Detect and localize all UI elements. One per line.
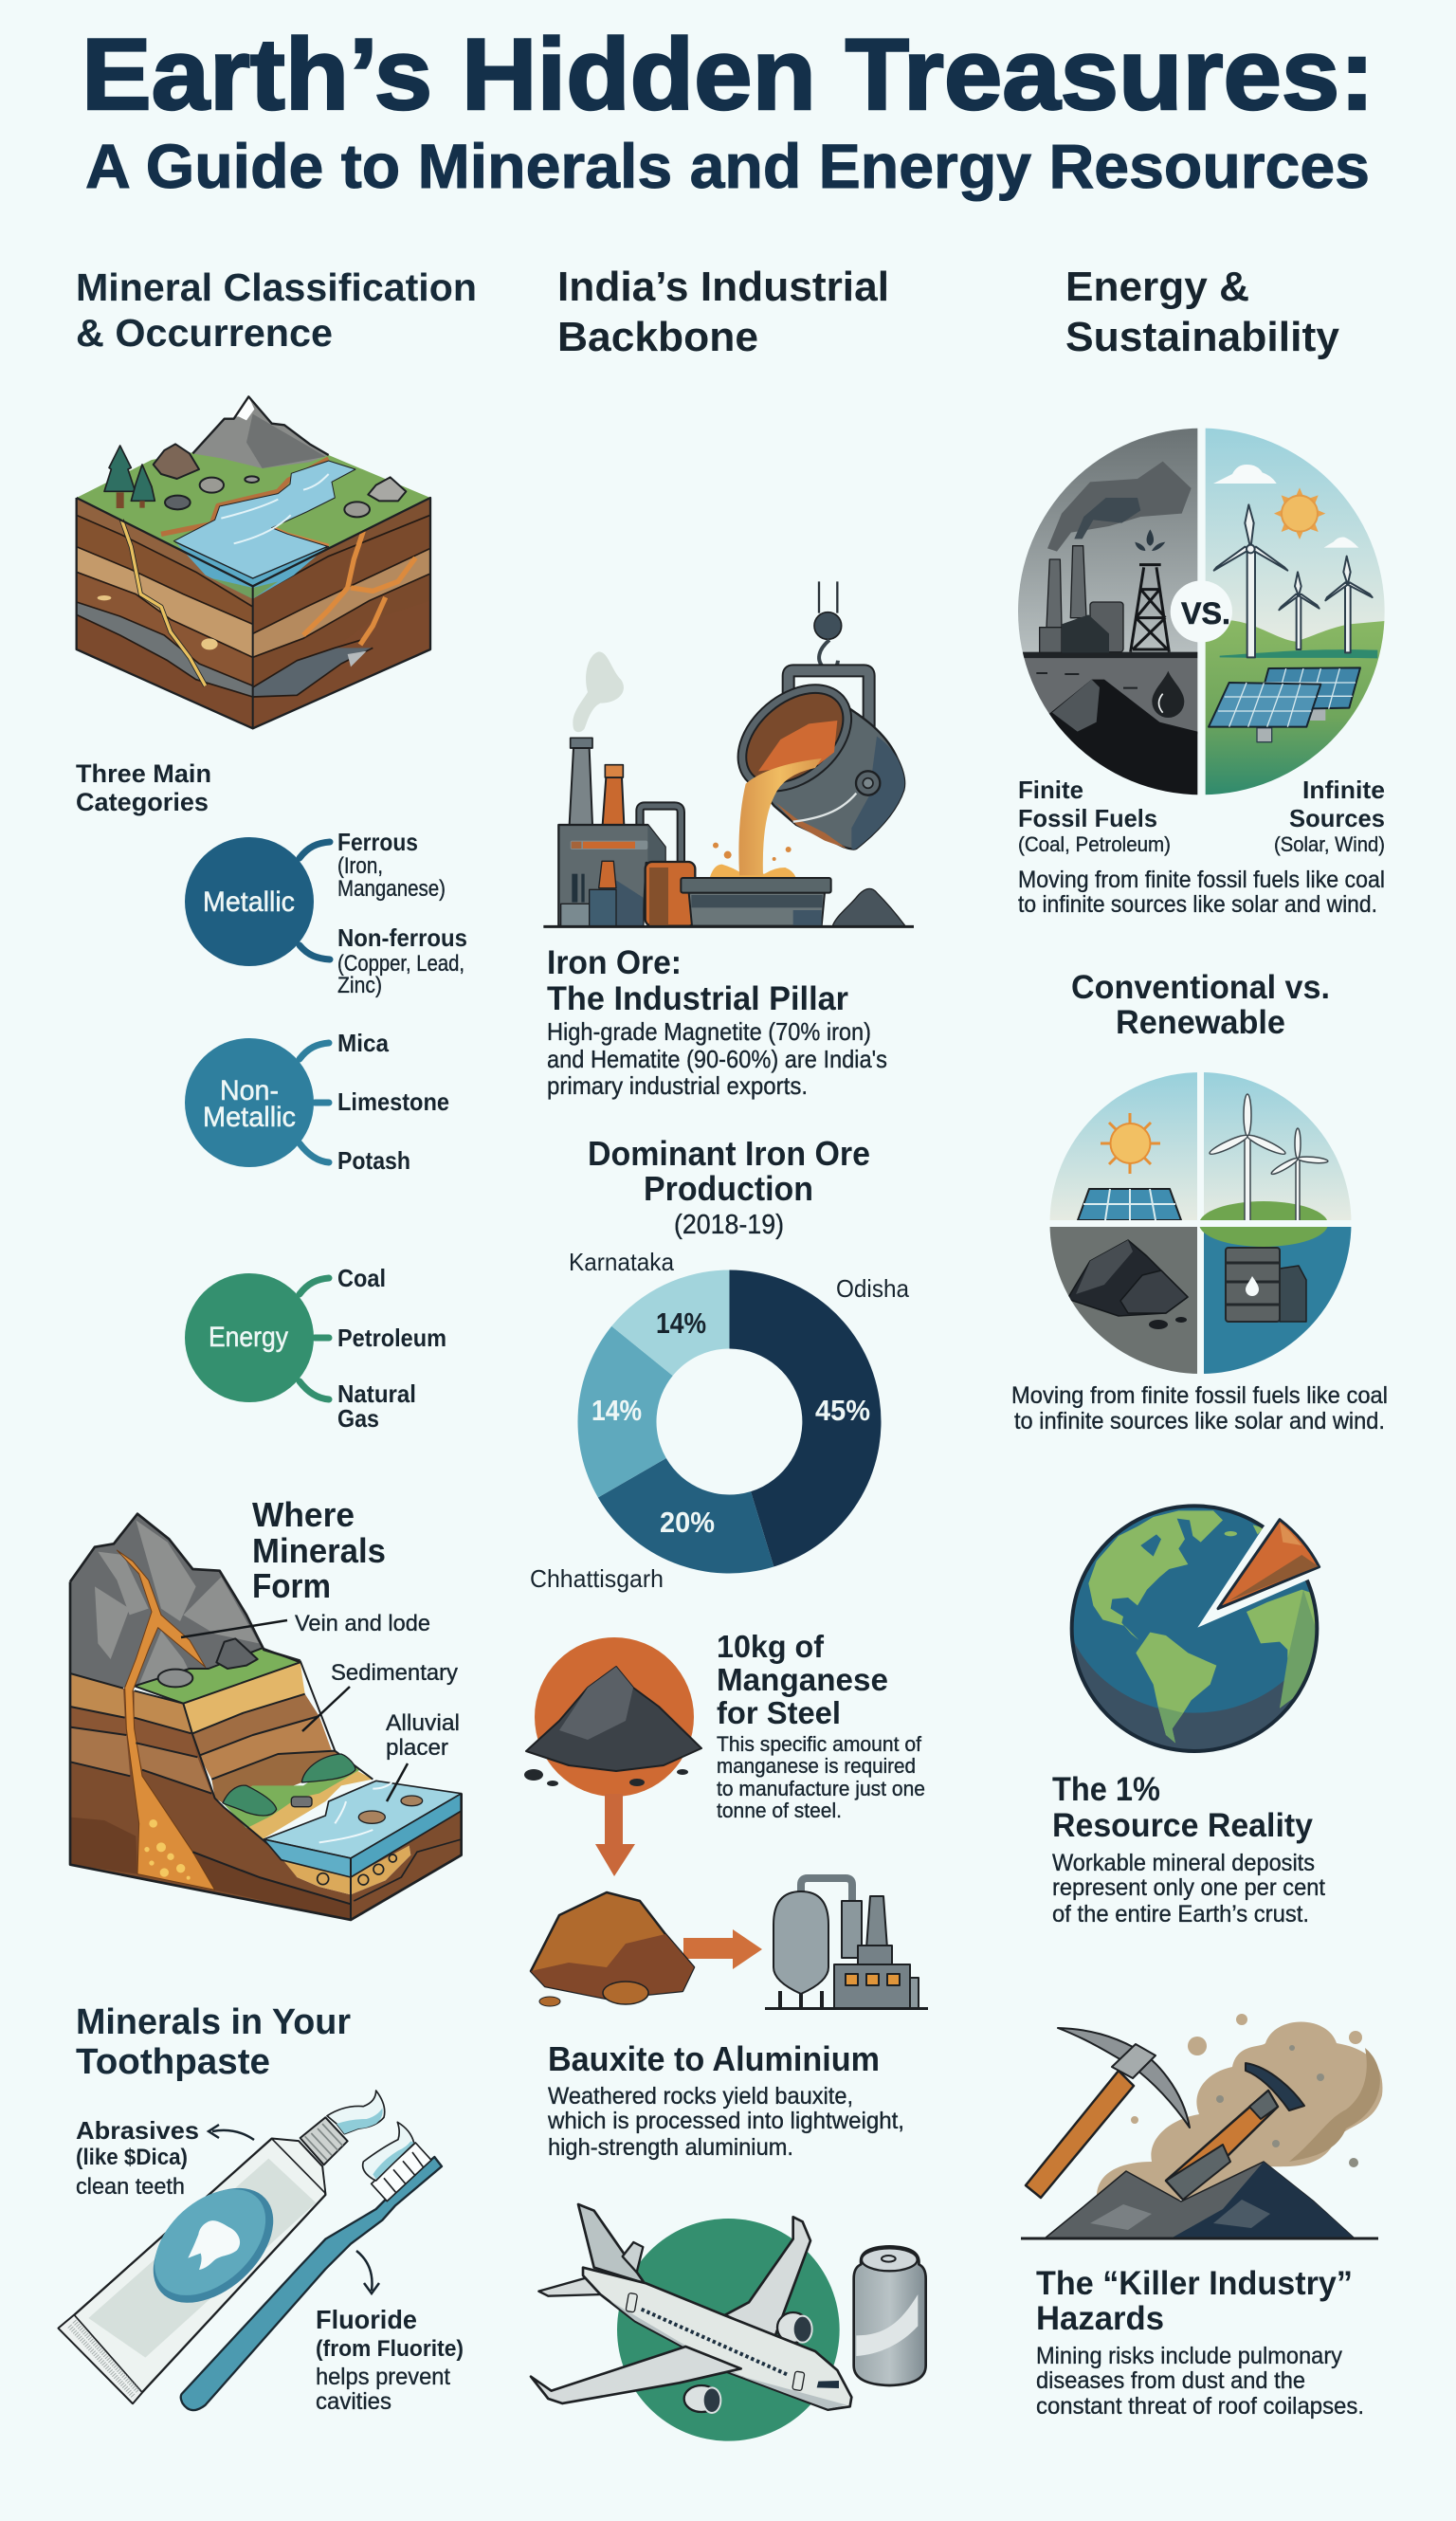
text: one percent resource reality: The 1% [1052, 1771, 1160, 1808]
label: alluvial placer: Alluvial [386, 1710, 460, 1736]
heading: conventional vs renewable [1071, 969, 1330, 1041]
heading: minerals in your toothpaste: Toothpaste [76, 2042, 270, 2082]
heading: India's industrial backbone: Backbone [557, 314, 758, 360]
heading: three main categories [76, 759, 211, 816]
text: one percent resource reality: Workable mineral deposits [1052, 1850, 1315, 1876]
label: vein and lode: Vein and lode [295, 1611, 430, 1636]
text: moving from finite, second [1011, 1382, 1388, 1434]
annotation: abrasives: clean teeth [76, 2174, 185, 2200]
category: non-metallic: Potash [337, 1146, 410, 1175]
text: one percent resource reality: represent only one per cent [1052, 1874, 1325, 1901]
illustration: isometric geological block [77, 396, 430, 728]
text: manganese for steel: to manufacture just one [717, 1777, 925, 1800]
illustration: airplane and can [531, 2204, 926, 2441]
text: bauxite to aluminium: Bauxite to Aluminium [548, 2039, 880, 2078]
text: manganese for steel: 10kg of [717, 1629, 825, 1664]
heading: India's industrial backbone [557, 264, 889, 360]
label: alluvial placer [386, 1710, 460, 1801]
title: A Guide to Minerals and Energy Resources [85, 131, 1370, 201]
text: bauxite to aluminium [547, 2039, 904, 2161]
donut chart: iron ore production: 20% [660, 1506, 715, 1539]
heading: dominant iron ore production: (2018-19) [674, 1210, 784, 1240]
label: vs badge: VS. [1181, 596, 1230, 630]
text: one percent resource reality: of the entire Earth’s crust. [1052, 1901, 1309, 1927]
category: metallic: Zinc) [337, 973, 382, 998]
text: moving from finite, second: Moving from finite fossil fuels like coal [1011, 1382, 1388, 1409]
category: non-metallic: Metallic [203, 1102, 296, 1133]
text: killer industry hazards: Mining risks include pulmonary [1036, 2343, 1342, 2369]
heading: where minerals form: Where [252, 1495, 355, 1534]
label: vein and lode [181, 1611, 430, 1637]
text: bauxite to aluminium: which is processed into lightweight, [547, 2108, 904, 2134]
donut chart: iron ore production: 14% [592, 1394, 642, 1427]
text: killer industry hazards: Hazards [1036, 2300, 1164, 2337]
heading: minerals in your toothpaste: Minerals in Your [76, 2002, 351, 2042]
text: iron ore pillar: High-grade Magnetite (70% iron) [547, 1017, 871, 1046]
category: non-metallic: Mica [337, 1029, 389, 1057]
heading: energy and sustainability: Sustainability [1065, 314, 1340, 360]
text: iron ore pillar: The Industrial Pillar [547, 980, 848, 1017]
heading: mineral classification: Mineral Classification [76, 265, 477, 309]
text: one percent resource reality [1052, 1771, 1325, 1927]
heading: three main categories: Three Main [76, 759, 211, 788]
text: manganese for steel: This specific amount of [717, 1732, 922, 1756]
text: manganese for steel: manganese is required [717, 1754, 916, 1778]
text: killer industry hazards: diseases from dust and the [1036, 2367, 1305, 2394]
donut chart: iron ore production: Karnataka [569, 1248, 674, 1276]
illustration: mining hazards pick and hammer [1021, 2014, 1382, 2238]
text: moving from finite, second: to infinite sources like solar and wind. [1014, 1408, 1385, 1434]
text: bauxite to aluminium: Weathered rocks yield bauxite, [548, 2083, 853, 2110]
annotation: abrasives [76, 2116, 254, 2200]
illustration: four quadrant energy circle [1049, 1072, 1353, 1375]
illustration: manganese ore on orange disc [524, 1637, 701, 1876]
annotation: fluoride: cavities [316, 2388, 391, 2415]
text: killer industry hazards: constant threat of roof coilapses. [1036, 2393, 1364, 2420]
category: metallic: Metallic [203, 886, 295, 918]
category: metallic: (Copper, Lead, [337, 951, 464, 977]
heading: dominant iron ore production: Dominant Iron Ore [588, 1134, 870, 1173]
text: killer industry hazards: The “Killer Industry” [1036, 2265, 1353, 2302]
annotation: abrasives: Abrasives [76, 2116, 199, 2145]
category: metallic: (Iron, [337, 853, 383, 879]
text: manganese for steel: Manganese [717, 1662, 888, 1697]
donut chart: iron ore production [530, 1248, 909, 1593]
text: finite fossil fuels: Finite [1018, 776, 1083, 804]
heading: mineral classification [76, 265, 477, 355]
annotation: abrasives: (like $Dica) [76, 2145, 188, 2170]
text: iron ore pillar [547, 944, 887, 1100]
category: non-metallic [185, 1029, 449, 1175]
text: moving from finite: to infinite sources like solar and wind. [1018, 891, 1377, 918]
text: finite fossil fuels: (Coal, Petroleum) [1018, 832, 1171, 856]
text: killer industry hazards [1036, 2265, 1364, 2420]
illustration: bauxite rock to refinery [531, 1878, 928, 2008]
text: one percent resource reality: Resource Reality [1052, 1807, 1314, 1844]
text: iron ore pillar: primary industrial exports. [547, 1071, 808, 1100]
label: sedimentary [302, 1660, 458, 1731]
text: iron ore pillar: and Hematite (90-60%) are India's [547, 1045, 887, 1073]
heading: where minerals form: Minerals [252, 1531, 386, 1570]
label: sedimentary: Sedimentary [331, 1660, 458, 1686]
annotation: fluoride: Fluoride [316, 2305, 417, 2334]
category: metallic [185, 828, 467, 998]
text: infinite sources: Sources [1289, 804, 1385, 832]
heading: dominant iron ore production [588, 1134, 870, 1240]
heading: dominant iron ore production: Production [644, 1169, 813, 1208]
text: manganese for steel [717, 1629, 925, 1822]
category: energy: Energy [209, 1322, 288, 1353]
annotation: fluoride [316, 2251, 464, 2415]
text: infinite sources: (Solar, Wind) [1274, 832, 1385, 856]
heading: energy and sustainability: Energy & [1065, 264, 1249, 310]
illustration: cliff cross-section [70, 1514, 462, 1920]
title: Earth’s Hidden Treasures: [82, 17, 1374, 131]
annotation: fluoride: (from Fluorite) [316, 2336, 464, 2362]
donut chart: iron ore production: 45% [815, 1394, 870, 1427]
text: infinite sources: Infinite [1302, 776, 1385, 804]
text: manganese for steel: tonne of steel. [717, 1799, 842, 1822]
text: bauxite to aluminium: high-strength aluminium. [548, 2134, 793, 2161]
illustration: toothpaste tube and brush [59, 2091, 442, 2410]
category: energy: Gas [337, 1404, 379, 1433]
heading: conventional vs renewable: Conventional vs. [1071, 969, 1330, 1006]
heading: where minerals form: Form [252, 1566, 331, 1605]
donut chart: iron ore production: Chhattisgarh [530, 1564, 664, 1593]
illustration: steel plant and ladle [543, 581, 914, 926]
category: metallic: Non-ferrous [337, 923, 467, 952]
category: non-metallic: Limestone [337, 1087, 449, 1116]
heading: conventional vs renewable: Renewable [1116, 1004, 1285, 1041]
title [82, 17, 1374, 201]
annotation: fluoride: helps prevent [316, 2364, 450, 2390]
donut chart: iron ore production: 14% [656, 1306, 706, 1340]
category: energy [185, 1264, 446, 1433]
heading: minerals in your toothpaste [76, 2002, 351, 2082]
text: moving from finite: Moving from finite fossil fuels like coal [1018, 867, 1385, 893]
text: finite fossil fuels: Fossil Fuels [1018, 804, 1157, 832]
text: moving from finite [1018, 867, 1385, 918]
text: manganese for steel: for Steel [717, 1695, 841, 1730]
category: non-metallic: Non- [220, 1075, 279, 1106]
illustration: fossil fuels versus renewables circle [1014, 422, 1392, 796]
heading: mineral classification: & Occurrence [76, 311, 333, 355]
heading: energy and sustainability [1065, 264, 1340, 360]
illustration: earth with one percent wedge [1069, 1504, 1321, 1753]
category: energy: Petroleum [337, 1324, 446, 1352]
heading: India's industrial backbone: India’s Industrial [557, 264, 889, 310]
text: iron ore pillar: Iron Ore: [547, 944, 682, 981]
category: energy: Coal [337, 1264, 386, 1292]
label: alluvial placer: placer [386, 1735, 448, 1761]
category: energy: Natural [337, 1379, 416, 1408]
text: finite fossil fuels [1018, 776, 1171, 856]
category: metallic: Ferrous [337, 828, 418, 856]
donut chart: iron ore production: Odisha [836, 1274, 909, 1303]
text: infinite sources [1274, 776, 1385, 856]
heading: where minerals form [252, 1495, 386, 1605]
heading: three main categories: Categories [76, 788, 209, 816]
category: metallic: Manganese) [337, 876, 446, 902]
